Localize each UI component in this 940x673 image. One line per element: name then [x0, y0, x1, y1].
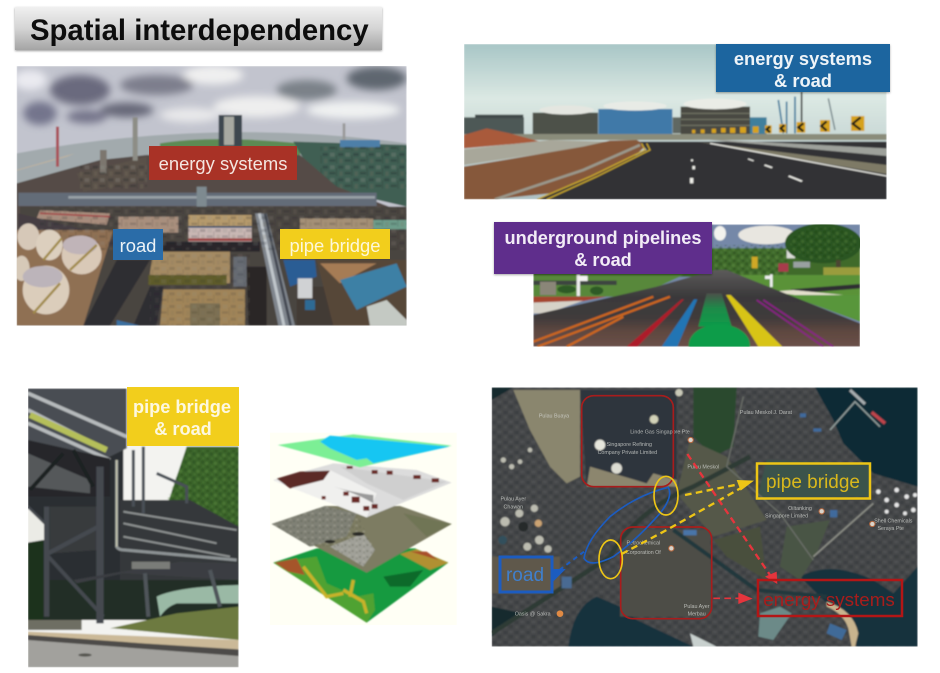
label: energy systems & road: & road [774, 70, 832, 91]
map place names: Singapore Refining [607, 442, 652, 448]
panel: underground pipelines under road photo [533, 224, 860, 347]
map label: energy systems: energy systems [763, 589, 895, 610]
map place names: Shell Chemicals [874, 519, 913, 525]
label: energy systems: energy systems [159, 153, 287, 174]
map place names: Company Private Limited [598, 450, 657, 456]
map label: road: road [506, 565, 544, 586]
label: pipe bridge & road: pipe bridge [133, 397, 231, 417]
label: energy systems & road: energy systems [734, 48, 872, 69]
label: underground pipelines & road: & road [574, 250, 632, 270]
label: pipe bridge & road: & road [154, 419, 212, 439]
map place names: Pulau Meskol J. Darat [740, 410, 793, 416]
map label: road [500, 557, 552, 592]
map pins [669, 437, 875, 551]
satellite base [492, 387, 918, 647]
map place names: Petrochemical [626, 541, 660, 547]
panel: GIS map layers [270, 433, 457, 625]
label: road: road [120, 235, 156, 256]
map place names: Merbau [688, 611, 706, 617]
label: road [113, 229, 163, 260]
panel: annotated satellite map [492, 387, 918, 647]
map place names: Singapore Limited [765, 514, 808, 520]
label: energy systems & road [716, 44, 890, 92]
layer: buildings and roads [273, 463, 452, 517]
panel: storage tanks and road photo [464, 44, 887, 199]
map label: energy systems [758, 580, 902, 616]
label: pipe bridge [280, 229, 390, 259]
label: pipe bridge & road [127, 387, 239, 446]
layer: aerial imagery [272, 506, 452, 573]
map place names: Corporation Of [626, 550, 661, 556]
map place names: Oasis @ Sakra [515, 612, 551, 618]
panel: refinery aerial photo [13, 66, 407, 326]
label: underground pipelines & road [494, 222, 712, 274]
overlay: energy system arrows [687, 454, 777, 604]
layer: water and vegetation [278, 434, 452, 467]
label: underground pipelines & road: underground pipelines [504, 228, 702, 248]
panel: pipe bridge photo [28, 388, 239, 667]
overlay: pipe bridge crossings and arrows [599, 476, 754, 579]
label: energy systems [149, 146, 297, 180]
overlay: energy system zones [582, 396, 712, 619]
map place names: Chawan [504, 504, 523, 510]
label: pipe bridge: pipe bridge [289, 235, 381, 256]
map place names: Pulau Buaya [539, 413, 569, 419]
map place names: Pulau Ayer [684, 604, 710, 610]
map place names: Pulau Ayer [500, 497, 526, 503]
map place names: Oiltanking [788, 506, 812, 512]
map place names: Pulau Meskol [687, 465, 719, 471]
overlay: road route [553, 487, 670, 581]
map label: pipe bridge [757, 464, 870, 498]
map place names [500, 410, 913, 618]
map place names: Linde Gas Singapore Pte [630, 429, 690, 435]
map place names: Seraya Pte [877, 526, 904, 532]
map label: pipe bridge: pipe bridge [766, 472, 860, 493]
title: Spatial interdependency [30, 14, 369, 47]
layer: terrain elevation [273, 548, 448, 623]
